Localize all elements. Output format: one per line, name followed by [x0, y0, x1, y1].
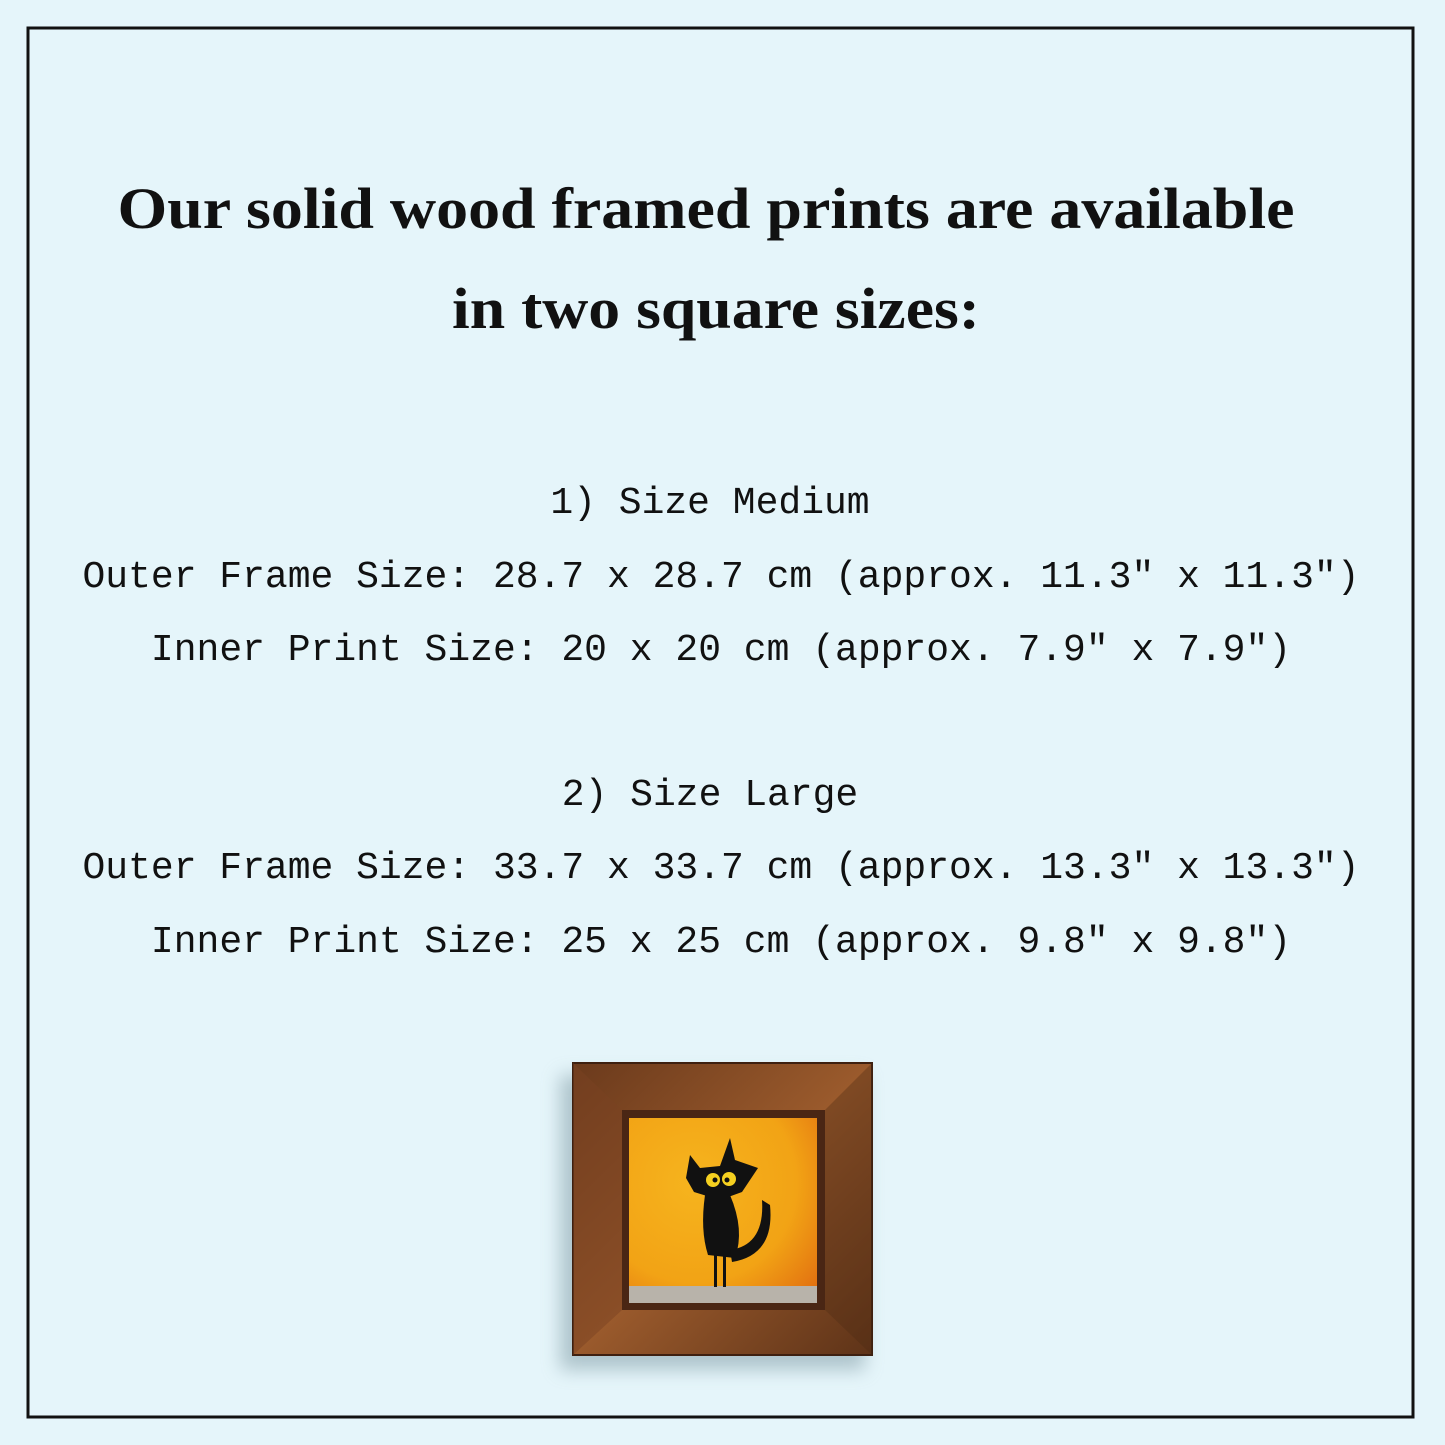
text block: size medium: Inner Print Size: 20 x 20 cm (approx. 7.9" x 7.9") [151, 629, 1291, 672]
text block: size large [82, 774, 1360, 964]
text block: size medium [82, 482, 1360, 672]
title: Our solid wood framed prints are available [118, 176, 1294, 241]
text block: size large: Outer Frame Size: 33.7 x 33.7 cm (approx. 13.3" x 13.3") [82, 847, 1360, 890]
text block: size medium: 1) Size Medium [550, 482, 870, 525]
text block: size large: Inner Print Size: 25 x 25 cm (approx. 9.8" x 9.8") [151, 921, 1291, 964]
title: in two square sizes: [452, 276, 980, 341]
title [118, 176, 1294, 341]
text block: size medium: Outer Frame Size: 28.7 x 28.7 cm (approx. 11.3" x 11.3") [82, 556, 1360, 599]
framed print illustration [560, 1063, 872, 1370]
icon: black cat [686, 1138, 771, 1287]
text block: size large: 2) Size Large [562, 774, 858, 817]
